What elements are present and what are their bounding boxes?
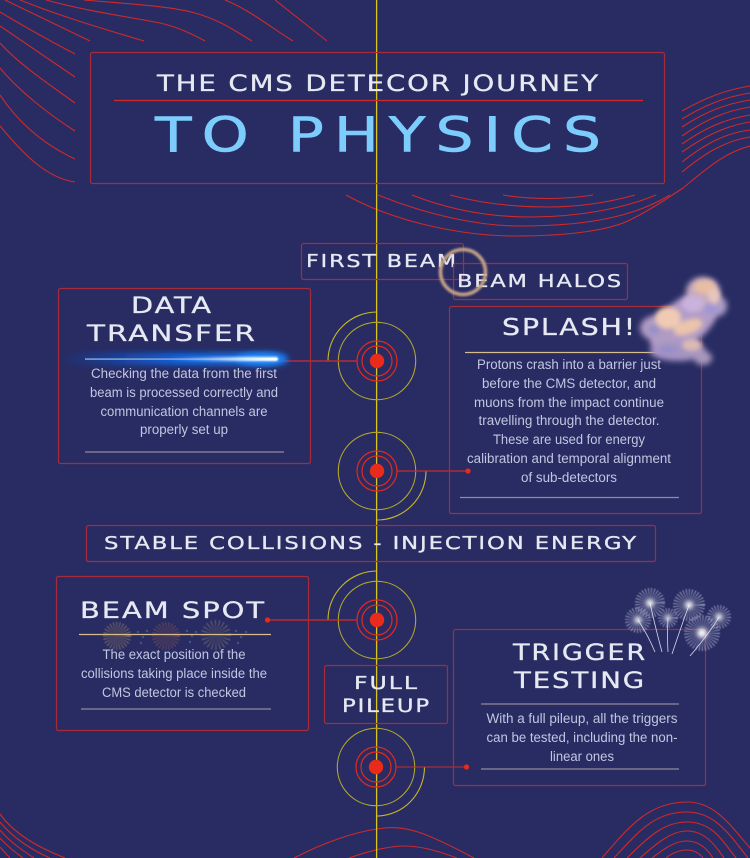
panel: splash (450, 306, 702, 514)
node: data transfer (270, 312, 416, 400)
node: trigger testing (337, 728, 469, 816)
node: beam spot (265, 571, 416, 659)
label: full pileup: PILEUP (342, 696, 431, 717)
body text: beam spot: The exact position of the (102, 647, 246, 662)
body text: trigger testing: linear ones (550, 749, 614, 764)
title line one: THE CMS DETECOR JOURNEY (156, 72, 600, 97)
heading: trigger testing (512, 641, 647, 694)
body text: data transfer: beam is processed correctly and (90, 385, 278, 400)
heading: trigger testing: TRIGGER (512, 641, 647, 666)
icon: cloud (639, 277, 731, 366)
title line two: TO PHYSICS (154, 108, 611, 164)
body text: data transfer (90, 366, 278, 437)
body text: data transfer: Checking the data from the first (91, 366, 277, 381)
body text: data transfer: properly set up (140, 422, 228, 437)
label: stable collisions (86, 526, 656, 562)
body text: beam spot: collisions taking place inside the (81, 666, 267, 681)
glowing beam divider (62, 353, 290, 365)
body text: beam spot: CMS detector is checked (102, 685, 246, 700)
heading: beam spot: BEAM SPOT (80, 599, 266, 624)
panel: data transfer (58, 288, 310, 464)
wave lines: bottom right (602, 802, 750, 858)
heading: splash: SPLASH! (502, 313, 637, 341)
body text: splash: Protons crash into a barrier just (477, 357, 661, 372)
body text: splash: travelling through the detector. (478, 413, 660, 428)
body text: splash: muons from the impact continue (474, 395, 664, 410)
body text: beam spot (81, 647, 267, 700)
wave lines: bottom center (294, 828, 474, 858)
title panel (90, 52, 664, 184)
icon: white fireworks (632, 596, 725, 656)
body text: splash: of sub-detectors (521, 470, 617, 485)
wave lines: top right (346, 86, 750, 236)
node: splash (338, 432, 471, 520)
body text: splash: These are used for energy (493, 432, 645, 447)
heading: data transfer: DATA (131, 294, 213, 319)
heading: trigger testing: TESTING (513, 669, 646, 694)
label: first beam: FIRST BEAM (306, 251, 458, 272)
wave lines: top left (0, 0, 327, 182)
body text: trigger testing: can be tested, including the non- (486, 730, 678, 745)
label: beam halos: BEAM HALOS (457, 271, 623, 292)
label: full pileup: FULL (354, 673, 419, 694)
central beam line (376, 0, 378, 858)
icon: small fireworks (110, 628, 247, 644)
body text: data transfer: communication channels are (100, 404, 268, 419)
body text: trigger testing (486, 711, 678, 764)
panel: beam spot (56, 576, 308, 730)
body text: splash: before the CMS detector, and (482, 376, 656, 391)
label: full pileup (324, 666, 448, 724)
label: beam halos (454, 264, 628, 300)
body text: splash: calibration and temporal alignment (467, 451, 671, 466)
label: first beam (302, 244, 464, 280)
heading: data transfer (86, 294, 257, 347)
wave lines: bottom left (0, 814, 65, 858)
body text: trigger testing: With a full pileup, all the triggers (486, 711, 678, 726)
heading: data transfer: TRANSFER (86, 322, 257, 347)
body text: splash (467, 357, 671, 485)
panel: trigger testing (454, 630, 706, 786)
label: stable collisions: STABLE COLLISIONS - INJECTION ENERGY (104, 533, 638, 554)
halo ring (440, 250, 486, 294)
